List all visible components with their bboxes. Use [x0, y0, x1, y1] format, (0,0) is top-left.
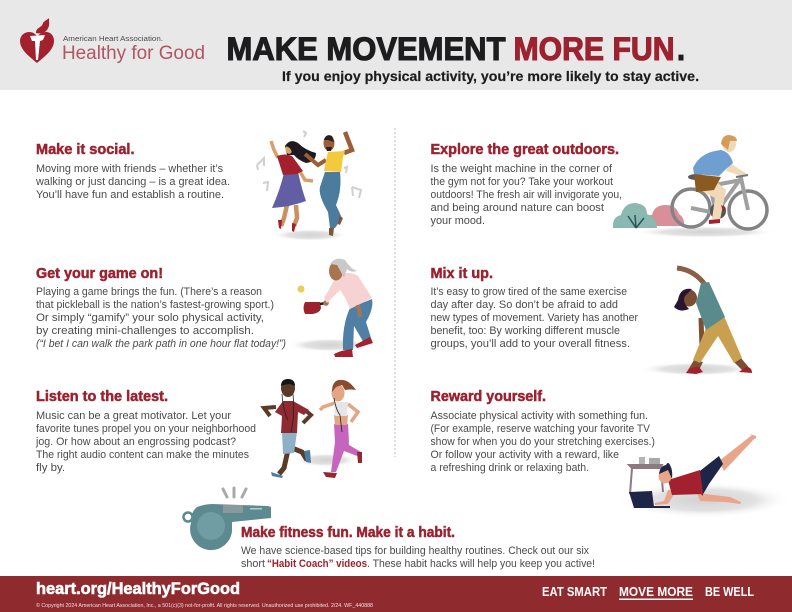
title: [226, 31, 685, 67]
footer band: [0, 576, 792, 612]
text block: mix it up: [430, 286, 638, 350]
text block: explore the great outdoors: the gym not for you? Take your workout: [430, 176, 614, 188]
text block: get your game on: that pickleball is the nation’s fastest-growing sport.): [36, 299, 274, 311]
heading: make fitness fun: Make fitness fun. Make it a habit.: [241, 525, 455, 541]
heading: get your game on: Get your game on!: [36, 266, 163, 282]
text block: listen to the latest: Music can be a great motivator. Let your: [36, 410, 231, 422]
heading: explore the great outdoors: Explore the great outdoors.: [430, 142, 619, 158]
heading: make it social: Make it social.: [36, 142, 134, 158]
text block: listen to the latest: jog. Or how about an engrossing podcast?: [35, 436, 236, 448]
text block: habit tips: We have science-based tips for building healthy routines. Check out our six: [241, 545, 589, 557]
icon: dancing couple: [257, 131, 361, 241]
panel: listen to the latest: [35, 389, 256, 474]
text block: get your game on: [36, 286, 286, 350]
text block: listen to the latest: The right audio content can make the minutes: [36, 449, 249, 461]
text block: mix it up: new types of movement. Variety has another: [430, 312, 638, 324]
icon: whistle: [184, 488, 271, 550]
text block: reward yourself: a refreshing drink or relaxing bath.: [430, 462, 589, 474]
text block: explore the great outdoors: Is the weight machine in the corner of: [430, 163, 613, 175]
panel: habit callout: [184, 488, 595, 570]
icon: cyclist and bushes: [613, 135, 777, 238]
heading: listen to the latest: Listen to the latest.: [36, 389, 168, 405]
text block: explore the great outdoors: outdoors! The fresh air will invigorate you,: [430, 189, 622, 201]
title: MAKE MOVEMENT: [226, 31, 506, 67]
text block: reward yourself: (For example, reserve watching your favorite TV: [430, 423, 650, 435]
text block: mix it up: benefit, too: By working different muscle: [430, 325, 620, 337]
icon: woman exercising in front of laptop: [617, 434, 791, 518]
footer navigation: EAT SMART: [542, 584, 607, 599]
text block: habit tips: short: [241, 558, 266, 570]
text block: make it social: walking or just dancing – is a great idea.: [35, 176, 230, 188]
title: .: [677, 31, 685, 67]
copyright: © Copyright 2024 American Heart Association, Inc., a 501(c)(3) not-for-profit. All rights reserved. Unauthorized use prohibited. 2/24. WF_440888: [36, 602, 373, 609]
header band: [0, 0, 792, 90]
heading: reward yourself: Reward yourself.: [430, 389, 546, 405]
icon: pickleball player: [288, 259, 373, 357]
icon: side stretch figure: [639, 268, 755, 376]
text block: listen to the latest: fly by.: [36, 462, 65, 474]
text block: explore the great outdoors: your mood.: [430, 215, 485, 227]
text block: reward yourself: Associate physical activity with something fun.: [430, 410, 648, 422]
logo: American Heart Association Healthy for Good: American Heart Association.: [63, 36, 163, 43]
footer navigation: BE WELL: [705, 584, 754, 599]
footer navigation: [542, 584, 754, 600]
text block: make it social: [35, 163, 230, 201]
text block: habit tips: . These habit hacks will help you keep you active!: [367, 558, 595, 570]
text block: mix it up: day after day. So don’t be afraid to add: [430, 299, 618, 311]
text block: reward yourself: [430, 410, 655, 474]
panel: explore the great outdoors: [430, 142, 622, 227]
heading: mix it up: Mix it up.: [430, 266, 493, 282]
text block: habit tips: “Habit Coach” videos: [267, 558, 367, 570]
logo: American Heart Association Healthy for Good: [20, 18, 205, 64]
panel: mix it up: [430, 266, 638, 350]
text block: reward yourself: show for when you do your stretching exercises.): [430, 436, 655, 448]
text block: make it social: You’ll have fun and establish a routine.: [36, 189, 224, 201]
footer url: heart.org/HealthyForGood: [36, 579, 240, 598]
text block: make it social: Moving more with friends – whether it’s: [36, 163, 223, 175]
text block: get your game on: (“I bet I can walk the park path in one hour flat today!”): [36, 338, 286, 350]
text block: mix it up: groups, you’ll add to your overall fitness.: [430, 338, 630, 350]
text block: listen to the latest: [35, 410, 256, 474]
panel: make it social: [35, 142, 230, 201]
text block: get your game on: Or simply “gamify” your solo physical activity,: [36, 312, 264, 324]
text block: habit tips: [241, 545, 595, 570]
text block: get your game on: Playing a game brings the fun. (There’s a reason: [36, 286, 262, 298]
text block: listen to the latest: favorite tunes propel you on your neighborhood: [36, 423, 256, 435]
text block: reward yourself: Or follow your activity with a reward, like: [430, 449, 619, 461]
text block: explore the great outdoors: and being around nature can boost: [430, 202, 605, 214]
title: MORE FUN: [514, 31, 674, 67]
footer navigation: MOVE MORE: [619, 584, 693, 599]
panel: get your game on: [36, 266, 286, 350]
icon: two runners with earphones: [264, 379, 362, 478]
text block: mix it up: It’s easy to grow tired of the same exercise: [430, 286, 627, 298]
logo: American Heart Association Healthy for Good: Healthy for Good: [62, 43, 205, 64]
text block: explore the great outdoors: [430, 163, 622, 227]
subtitle: If you enjoy physical activity, you’re more likely to stay active.: [282, 68, 699, 84]
panel: reward yourself: [430, 389, 655, 474]
text block: get your game on: by creating mini-challenges to accomplish.: [36, 325, 254, 337]
